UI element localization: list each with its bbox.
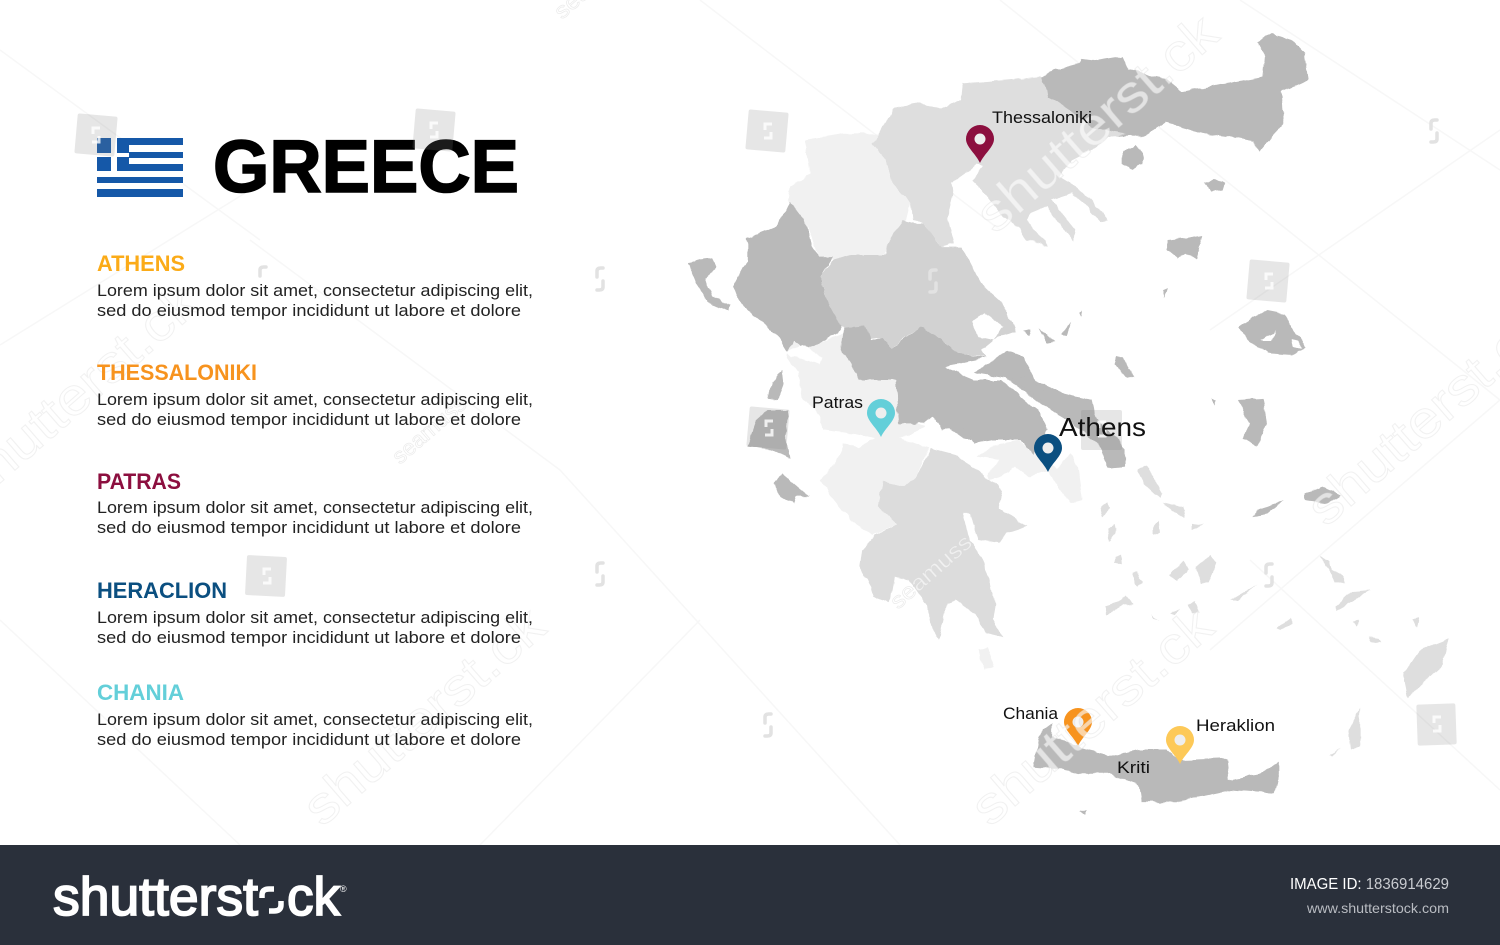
map labels: Chania	[1003, 704, 1059, 723]
pin: Athens	[1034, 434, 1062, 472]
watermark overlay: shutterst.ck	[960, 596, 1225, 837]
region: Central Greece	[841, 325, 1039, 440]
region: Western Peloponnese	[820, 437, 928, 535]
text block: Thessaloniki	[97, 360, 533, 429]
island: Lesbos	[1239, 310, 1306, 355]
region: West Macedonia	[788, 133, 911, 260]
gulf: Lesbos	[1261, 330, 1302, 348]
pin: Heraklion	[1166, 726, 1194, 764]
region: Central Greece south	[896, 380, 1048, 455]
island: Psara	[1212, 398, 1217, 405]
region: northern mainland	[688, 33, 1308, 440]
text block: Thessaloniki: Lorem ipsum dolor sit amet, consectetur adipiscing elit,	[97, 390, 533, 409]
text block: Chania: sed do eiusmod tempor incididunt ut labore et dolore	[97, 730, 521, 749]
island: Agios Efstratios	[1163, 288, 1168, 298]
text block: Chania: Lorem ipsum dolor sit amet, consectetur adipiscing elit,	[97, 710, 533, 729]
watermark overlay: shutterst.ck	[292, 596, 557, 837]
pin: Thessaloniki	[966, 125, 994, 163]
island: Skyros	[1115, 357, 1135, 378]
title: GREECE	[213, 125, 519, 208]
region: Epirus	[733, 202, 843, 353]
map labels: Patras	[812, 393, 863, 412]
region: Attica	[976, 440, 1082, 503]
island: Zakynthos	[774, 473, 809, 503]
pin: Patras	[867, 399, 895, 437]
island: Corfu	[688, 258, 731, 310]
island: Lemnos	[1168, 235, 1202, 260]
text block: Heraklion: sed do eiusmod tempor incididunt ut labore et dolore	[97, 628, 521, 647]
island: Northern Sporades	[1023, 312, 1083, 343]
watermark overlay: seamuss	[387, 391, 471, 469]
map of Greece	[688, 33, 1449, 815]
region: southern mainland and islands	[747, 377, 1449, 815]
island: Kythera	[979, 647, 995, 670]
island: Ikaria	[1252, 501, 1284, 517]
text block: Patras	[97, 469, 533, 537]
flag of Greece	[97, 138, 183, 197]
region: Peloponnese	[859, 448, 1027, 640]
region: East Macedonia and Thrace	[1041, 33, 1308, 152]
map labels	[812, 108, 1275, 777]
text block: Athens: ATHENS	[97, 251, 185, 276]
text block: Thessaloniki: sed do eiusmod tempor incididunt ut labore et dolore	[97, 410, 521, 429]
footer bar	[0, 845, 1500, 945]
text block: Athens: sed do eiusmod tempor incididunt ut labore et dolore	[97, 301, 521, 320]
island: Chios	[1238, 398, 1267, 447]
text block: Chania	[97, 680, 533, 749]
text block: Heraklion: Lorem ipsum dolor sit amet, consectetur adipiscing elit,	[97, 608, 533, 627]
image id: IMAGE ID: 1836914629	[1290, 876, 1449, 893]
region: Central Macedonia	[872, 77, 1125, 247]
watermark overlay: shutterst.ck	[965, 3, 1230, 244]
island: Samothrace	[1204, 178, 1225, 192]
text block: Patras: Lorem ipsum dolor sit amet, consectetur adipiscing elit,	[97, 498, 533, 517]
region: Aetolia	[786, 333, 925, 440]
text block: Thessaloniki: THESSALONIKI	[97, 360, 257, 385]
text block: Heraklion: HERACLION	[97, 578, 227, 603]
footer logo: ck	[287, 867, 341, 927]
map labels: Athens	[1059, 412, 1146, 442]
watermark overlay: seamuss	[885, 529, 977, 614]
text block: Athens: Lorem ipsum dolor sit amet, consectetur adipiscing elit,	[97, 281, 533, 300]
island: Lefkada	[768, 370, 784, 400]
island: Euboea north	[974, 350, 1094, 420]
pin: Chania	[1064, 708, 1092, 746]
footer logo: shutterst	[53, 867, 258, 927]
text block: Chania: CHANIA	[97, 680, 184, 705]
islands: Cyclades and Dodecanese	[1100, 465, 1449, 757]
island: Cephalonia	[747, 410, 790, 458]
map labels: Thessaloniki	[992, 108, 1092, 127]
gulf: Amvrakikos	[787, 345, 823, 365]
map labels: Heraklion	[1196, 716, 1275, 735]
region: Thessaly	[821, 220, 1017, 357]
map labels: Kriti	[1117, 758, 1150, 777]
island: Thasos	[1123, 145, 1143, 170]
text block: Patras: sed do eiusmod tempor incididunt ut labore et dolore	[97, 518, 521, 537]
text block: Patras: PATRAS	[97, 469, 181, 494]
region: Patras coast	[800, 380, 898, 423]
website: www.shutterstock.com	[1306, 900, 1449, 916]
island: Euboea south	[1011, 377, 1126, 468]
footer logo: ®	[340, 884, 347, 894]
gulf: Pagasetic	[972, 313, 1002, 340]
text block: Heraklion	[97, 578, 533, 647]
text block: Athens	[97, 251, 533, 320]
island: Samos	[1305, 487, 1341, 503]
island: Kriti	[1034, 723, 1279, 815]
